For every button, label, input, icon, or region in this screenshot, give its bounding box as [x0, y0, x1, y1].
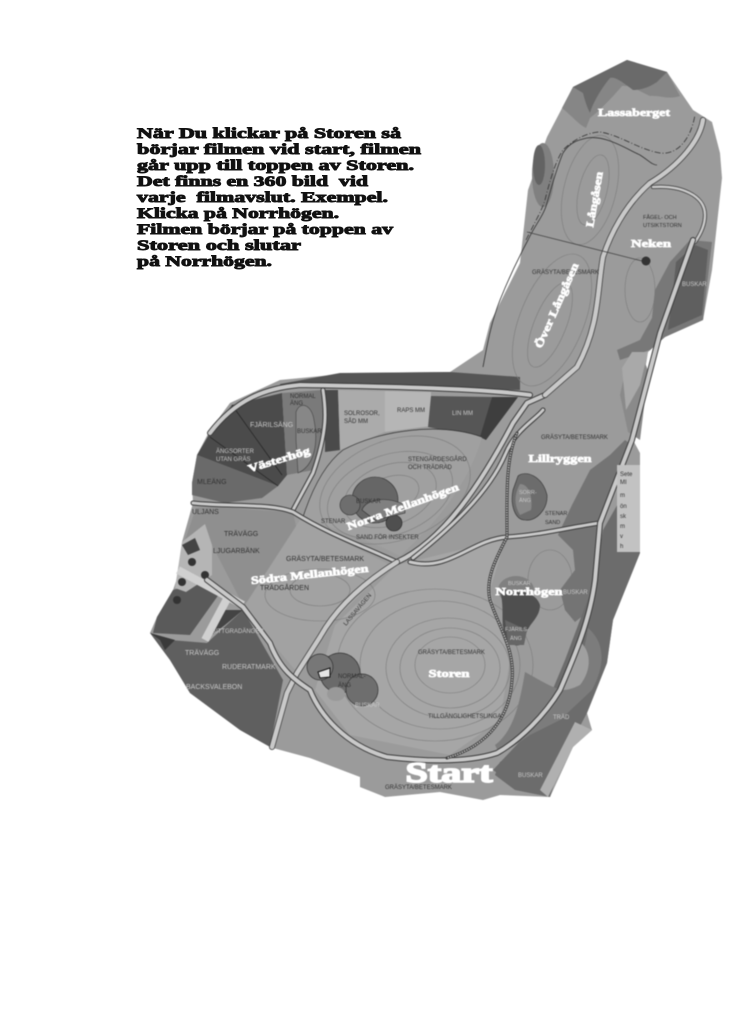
small map labels: FJÄRILS- [505, 626, 529, 633]
place name labels: Norra Mellanhögen [345, 481, 460, 533]
eastern shrubs [493, 240, 712, 797]
small map labels [185, 214, 707, 791]
shrub circle: Storen [307, 653, 378, 706]
small map labels: SAND [545, 520, 560, 526]
instructions text block: börjar filmen vid start, filmen [137, 142, 421, 158]
small map labels: BUSKAR [356, 499, 381, 505]
small map labels: LIN MM [452, 411, 473, 417]
small map labels: UTAN GRÄS [216, 456, 251, 463]
small map labels: ULJANS [192, 509, 219, 516]
information sign: v [620, 534, 623, 540]
information sign: h [620, 544, 623, 550]
place name labels: Lassaberget [598, 107, 670, 119]
information sign: m [620, 493, 625, 499]
instructions text block: går upp till toppen av Storen. [137, 158, 414, 174]
shrub circle: Lillryggen [512, 474, 547, 520]
instructions text block [137, 126, 421, 270]
small map labels: SÅD MM [344, 418, 368, 425]
small map labels: ÄNG [290, 400, 303, 407]
place name labels: Norrhögen [496, 586, 562, 598]
place name labels: Neken [631, 238, 671, 250]
small map labels: TRÄVÄGG [185, 649, 219, 657]
place name labels: Långåsen [584, 171, 606, 228]
neken tower marker [642, 256, 650, 266]
small map labels: MLEÄNG [197, 478, 227, 486]
small map labels: GRÄSYTA/BETESMARK [418, 649, 485, 656]
instructions text block: Det finns en 360 bild vid [137, 174, 368, 190]
instructions text block: på Norrhögen. [137, 254, 272, 270]
small map labels: BUSKAR [297, 429, 322, 435]
western meadows [192, 390, 325, 503]
small map labels: GRÄSYTA/BETESMARK [541, 434, 608, 441]
small map labels: LASSAVÄGEN [342, 592, 373, 627]
central hills [185, 429, 510, 755]
instructions text block: Storen och slutar [137, 238, 302, 254]
small map labels: SOLROSOR, [344, 411, 380, 417]
small map labels: STENGÄRDESGÅRD [408, 456, 467, 463]
roads [193, 115, 705, 760]
information sign [617, 465, 640, 552]
small map labels: GRÄSYTA/BETESMARK [286, 555, 364, 563]
small map labels: TILLGÄNGLIGHETSLINGA [428, 713, 501, 720]
instructions text block: varje filmavslut. Exempel. [137, 190, 388, 206]
instructions text block: Klicka på Norrhögen. [137, 206, 339, 222]
small map labels: BUSKAR [518, 773, 543, 779]
small map labels: SORR- [519, 490, 537, 496]
small map labels: GRÄSYTA/BETESMARK [532, 269, 599, 276]
small map labels: LJUGARBÄNK [213, 547, 260, 555]
small map labels: TRÄD [553, 714, 570, 721]
small map labels: TRÄDGÅRDEN [260, 583, 309, 592]
information sign: m [620, 524, 625, 530]
crop fields [280, 372, 520, 452]
small map labels: ÄNG [519, 497, 531, 504]
small map labels: BUSKAR [563, 590, 588, 596]
small map labels: TRÄVÄGG [224, 530, 258, 538]
place name labels: Start [406, 757, 493, 789]
instructions text block: När Du klickar på Storen så [137, 126, 402, 142]
information sign: Sete [620, 472, 633, 478]
small map labels: NORMAL [290, 394, 316, 400]
place name labels: Västerhög [247, 445, 312, 475]
small map labels: BUSKAR [682, 282, 707, 288]
small map labels: NORMAL- [338, 674, 366, 680]
small map labels: GRÄSYTA/BETESMARK [385, 784, 452, 791]
information sign: sk [620, 514, 627, 520]
small map labels: STENAR [321, 519, 346, 525]
information sign: MI [620, 480, 627, 486]
small map labels: SAND FÖR INSEKTER [356, 534, 419, 541]
small map labels: BUSKAR [355, 703, 380, 709]
place name labels [247, 107, 671, 789]
small map labels: STENAR [545, 511, 567, 517]
small map labels: ÄNG [510, 635, 522, 642]
information sign: ön [620, 504, 627, 510]
place name labels: Över Långåsen [532, 261, 581, 350]
small map labels: SITTGRADÄNGER [212, 628, 264, 635]
place name labels: Södra Mellanhögen [250, 563, 369, 587]
contour lines [265, 129, 655, 741]
instructions text block: Filmen börjar på toppen av [137, 222, 394, 238]
small map labels: BACKSVALEBON [186, 684, 242, 691]
small map labels: FJÄRILSÄNG [250, 421, 293, 429]
small map labels: BUSKAR [508, 581, 531, 587]
shrub circle: Norra Mellanhögen [340, 477, 405, 531]
small map labels: RAPS MM [397, 408, 425, 414]
small map labels: UTSIKTSTORN [643, 223, 682, 229]
place name labels: Storen [428, 668, 470, 680]
park map [150, 60, 722, 800]
land outline [150, 60, 722, 800]
small map labels: RUDERATMARK [222, 664, 276, 671]
southwest ruderal land [150, 524, 283, 747]
small map labels: ÄNGSORTER [216, 448, 255, 455]
small map labels: OCH TRÄDRAD [408, 464, 453, 471]
small map labels: ÄNG [338, 682, 351, 689]
shrub circle: Norrhögen [498, 576, 540, 645]
small map labels: FÅGEL- OCH [643, 214, 677, 221]
Lassaberget terrain [532, 60, 680, 207]
place name labels: Lillryggen [528, 453, 592, 465]
